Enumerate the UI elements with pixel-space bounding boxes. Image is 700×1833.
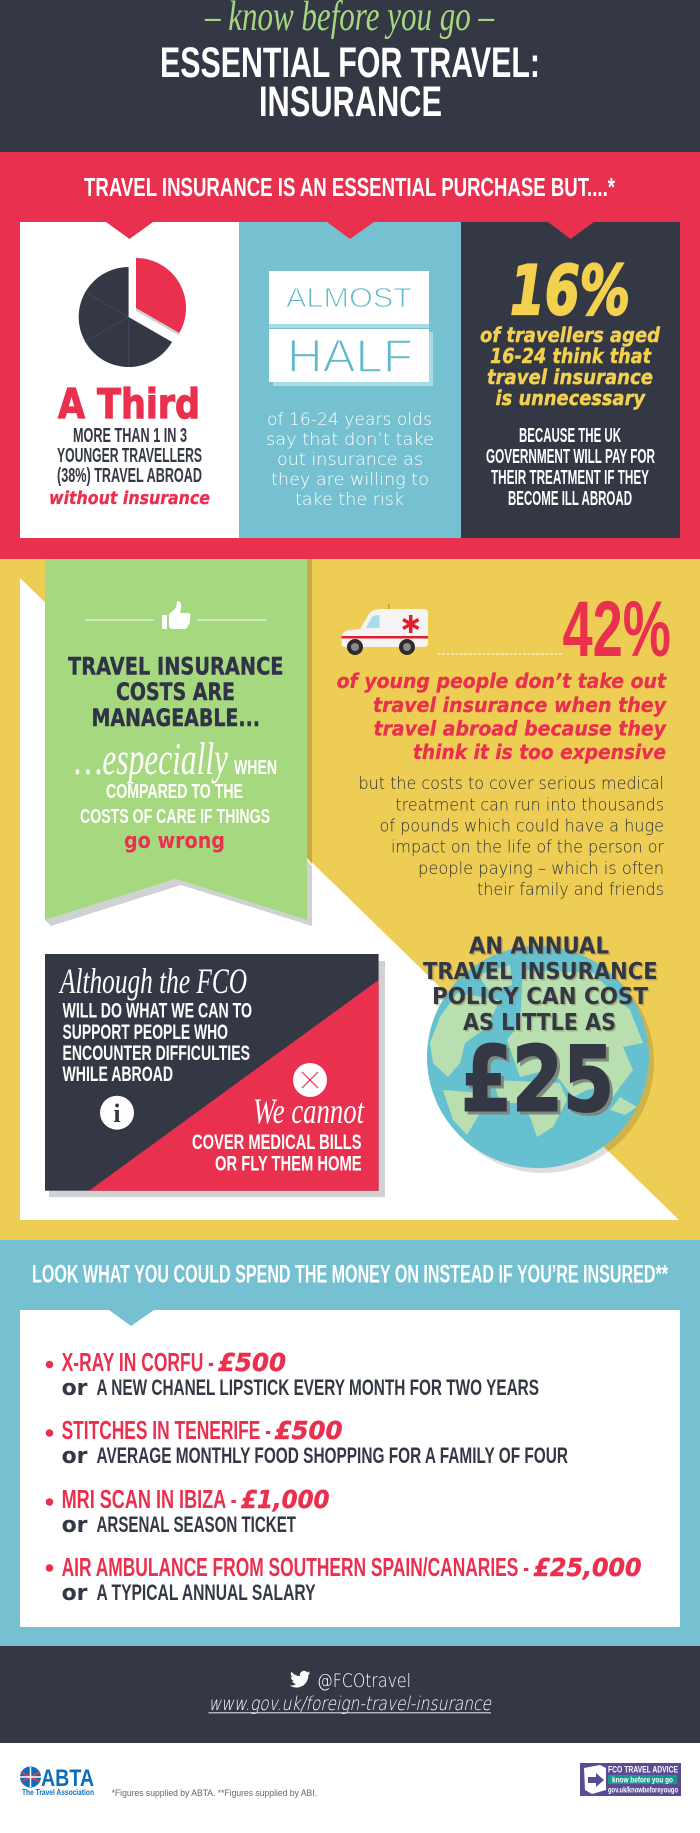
- cannot text: OR FLY THEM HOME: [215, 1153, 362, 1176]
- dividers and thumb icon: [85, 601, 266, 629]
- ribbon subtext: go wrong: [124, 829, 225, 854]
- red statement: travel insurance when they: [373, 693, 668, 717]
- body text: treatment can run into thousands: [396, 796, 664, 816]
- list item: x-ray: £500: [218, 1348, 286, 1377]
- list item: mri: £1,000: [241, 1485, 330, 1514]
- list item: stitches: [46, 1415, 568, 1469]
- yellow statement: travel insurance: [487, 365, 653, 389]
- cannot text: [192, 1131, 362, 1176]
- body text: but the costs to cover serious medical: [358, 774, 664, 794]
- body text: of pounds which could have a huge: [380, 817, 664, 837]
- red statement: of young people don’t take out: [337, 669, 667, 693]
- list item: air ambulance: A TYPICAL ANNUAL SALARY: [96, 1580, 316, 1605]
- description: [266, 410, 434, 510]
- list item: air ambulance: £25,000: [534, 1553, 642, 1582]
- logo: FCO travel advice: know before you go: [612, 1776, 673, 1784]
- header band: [0, 0, 700, 152]
- list item: air ambulance: or: [62, 1581, 88, 1606]
- description: say that don’t take: [266, 430, 434, 450]
- list item: mri: [46, 1484, 329, 1538]
- panel: 16 percent: [461, 222, 680, 538]
- price: £25: [461, 1028, 614, 1133]
- body text: [358, 774, 664, 900]
- globe text: AN ANNUAL: [470, 935, 611, 961]
- icon: cross: [293, 1063, 327, 1097]
- label boxes: ALMOST: [286, 282, 412, 313]
- list item: x-ray: [46, 1347, 539, 1401]
- list item: stitches: STITCHES IN TENERIFE -: [62, 1415, 271, 1445]
- card text: SUPPORT PEOPLE WHO: [62, 1021, 228, 1044]
- yellow statement: of travellers aged: [480, 323, 661, 347]
- list item: air ambulance: [46, 1552, 641, 1606]
- title: ESSENTIAL FOR TRAVEL:: [160, 39, 540, 87]
- title: [160, 39, 540, 126]
- card text: WILL DO WHAT WE CAN TO: [62, 1000, 252, 1023]
- icon: ambulance: [342, 604, 428, 655]
- card text: [62, 1000, 252, 1086]
- description: of 16-24 years olds: [267, 410, 432, 430]
- ribbon subtext: [74, 733, 277, 854]
- website url: www.gov.uk/foreign-travel-insurance: [208, 1693, 492, 1715]
- list item: mri: or: [62, 1513, 88, 1538]
- panel: costs are manageable: [0, 559, 700, 1240]
- card script heading: Although the FCO: [59, 961, 247, 1001]
- description: MORE THAN 1 IN 3: [73, 425, 187, 447]
- stat: 16%: 16%: [510, 252, 630, 331]
- list item: x-ray: X-RAY IN CORFU -: [62, 1347, 214, 1377]
- yellow statement: 16-24 think that: [490, 344, 652, 368]
- card text: ENCOUNTER DIFFICULTIES: [62, 1042, 250, 1065]
- icon: info: i: [113, 1099, 121, 1128]
- ribbon subtext: COMPARED TO THE: [106, 781, 243, 803]
- list item: mri: ARSENAL SEASON TICKET: [96, 1512, 296, 1537]
- globe text: POLICY CAN COST: [434, 986, 650, 1012]
- cannot heading: We cannot: [253, 1091, 365, 1131]
- emphasis: without insurance: [49, 488, 210, 509]
- globe text: POLICY CAN COST: [432, 984, 648, 1010]
- icon: twitter bird: [290, 1671, 310, 1687]
- label boxes: HALF: [287, 330, 413, 382]
- panel: almost half: [239, 222, 461, 538]
- price: £25: [464, 1031, 617, 1136]
- globe callout: [423, 933, 659, 1173]
- description: take the risk: [295, 490, 404, 510]
- label boxes: [269, 271, 433, 386]
- white statement: [486, 425, 655, 510]
- white statement: BECAUSE THE UK: [519, 425, 621, 447]
- cannot text: COVER MEDICAL BILLS: [192, 1131, 362, 1154]
- description: out insurance as: [277, 450, 423, 470]
- globe text: AS LITTLE AS: [463, 1010, 616, 1036]
- icon: info: [100, 1096, 134, 1130]
- body text: impact on the life of the person or: [391, 838, 664, 858]
- list item: stitches: £500: [274, 1416, 342, 1445]
- description: they are willing to: [271, 470, 429, 490]
- logo: FCO travel advice: [580, 1763, 681, 1796]
- panel: FCO card: [45, 954, 385, 1197]
- panel: a third: [20, 222, 239, 538]
- red statement: travel abroad because they: [374, 717, 667, 741]
- ribbon heading: MANAGEABLE...: [92, 704, 260, 732]
- description: [57, 425, 202, 487]
- list item: mri: MRI SCAN IN IBIZA -: [62, 1484, 237, 1514]
- twitter handle: @FCOtravel: [317, 1670, 411, 1692]
- description: (38%) TRAVEL ABROAD: [57, 465, 202, 487]
- stat: a third: A Third: [58, 380, 200, 428]
- globe text: [423, 933, 659, 1038]
- card text: WHILE ABROAD: [62, 1063, 173, 1086]
- body text: people paying – which is often: [418, 859, 664, 879]
- footer band: [0, 1646, 700, 1743]
- footnote: *Figures supplied by ABTA. **Figures supplied by ABI.: [112, 1788, 317, 1799]
- panel: essential purchase: [0, 152, 700, 559]
- logo: ABTA: ABTA: [41, 1765, 94, 1792]
- logo: ABTA: [20, 1765, 94, 1797]
- logo: ABTA: The Travel Association: [22, 1787, 94, 1797]
- panel: what you could spend: [0, 1240, 700, 1647]
- ribbon heading: TRAVEL INSURANCE: [68, 652, 284, 680]
- yellow statement: is unnecessary: [496, 386, 646, 410]
- red statement: think it is too expensive: [413, 740, 666, 764]
- ribbon subtext: COSTS OF CARE IF THINGS: [80, 806, 270, 828]
- globe text: AS LITTLE AS: [464, 1012, 618, 1038]
- title: INSURANCE: [259, 78, 442, 126]
- list item: x-ray: or: [62, 1376, 88, 1401]
- globe text: TRAVEL INSURANCE: [424, 960, 659, 986]
- ribbon heading: COSTS ARE: [116, 678, 235, 706]
- pie chart: [79, 258, 186, 367]
- list item: stitches: or: [62, 1444, 88, 1469]
- yellow statement: [480, 323, 661, 410]
- ribbon: [45, 559, 312, 926]
- ribbon subtext: WHEN: [234, 757, 277, 779]
- globe text: TRAVEL INSURANCE: [423, 959, 658, 985]
- red statement: [337, 669, 668, 764]
- globe text: AN ANNUAL: [469, 933, 609, 959]
- body text: their family and friends: [477, 880, 664, 900]
- ribbon heading: [68, 652, 284, 732]
- ribbon subtext: …especially: [74, 733, 228, 784]
- description: YOUNGER TRAVELLERS: [57, 445, 202, 467]
